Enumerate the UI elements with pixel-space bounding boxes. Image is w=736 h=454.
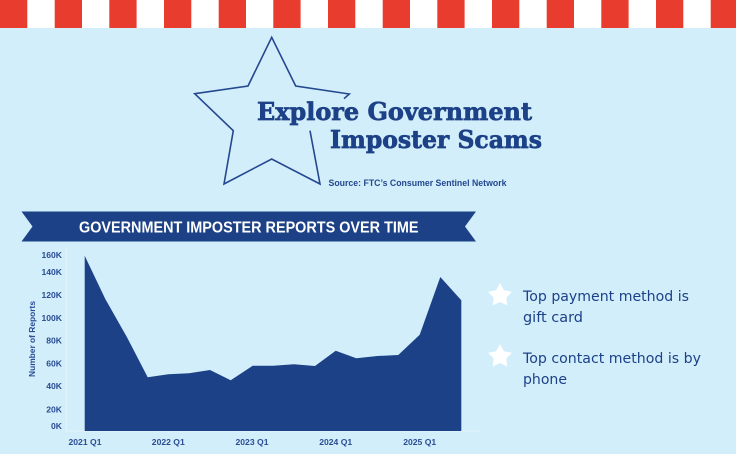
chart heading banner: GOVERNMENT IMPOSTER REPORTS OVER TIME [79, 220, 418, 236]
text: top contact method [522, 351, 701, 388]
x axis labels: 2023 Q1 [236, 437, 269, 447]
y axis labels: 100K [41, 313, 63, 323]
y axis title: Number of Reports [28, 300, 37, 377]
icon: star outline [195, 37, 349, 184]
text: top payment method: Top payment method is [522, 289, 689, 305]
chart axes [66, 247, 480, 433]
y axis labels: 80K [46, 336, 63, 346]
text: top contact method: Top contact method is by [522, 351, 701, 367]
area chart [28, 247, 480, 447]
title: Imposter Scams [330, 125, 542, 154]
area: reports over time [85, 256, 461, 431]
y axis labels: 20K [46, 404, 63, 414]
title [257, 97, 542, 154]
x axis labels: 2021 Q1 [69, 437, 102, 447]
y axis labels: 60K [46, 358, 63, 368]
y axis labels: 140K [41, 267, 63, 277]
icon: white star 2 [488, 344, 512, 366]
icon: white star 1 [488, 283, 512, 306]
y axis labels: 0K [51, 421, 63, 431]
y axis labels [41, 250, 63, 431]
y axis labels: 40K [46, 381, 63, 391]
x axis labels: 2025 Q1 [403, 437, 436, 447]
y axis labels: 160K [41, 250, 63, 260]
title: Explore Government [257, 97, 532, 126]
text: top payment method: gift card [523, 310, 583, 326]
text: top contact method: phone [523, 372, 567, 388]
source note: Source: FTC’s Consumer Sentinel Network [328, 178, 507, 188]
chart heading banner [22, 212, 476, 242]
x axis labels [69, 437, 436, 447]
y axis labels: 120K [41, 290, 63, 300]
text: top payment method [522, 289, 689, 326]
striped top border [0, 0, 736, 28]
x axis labels: 2024 Q1 [319, 437, 352, 447]
x axis labels: 2022 Q1 [152, 437, 185, 447]
